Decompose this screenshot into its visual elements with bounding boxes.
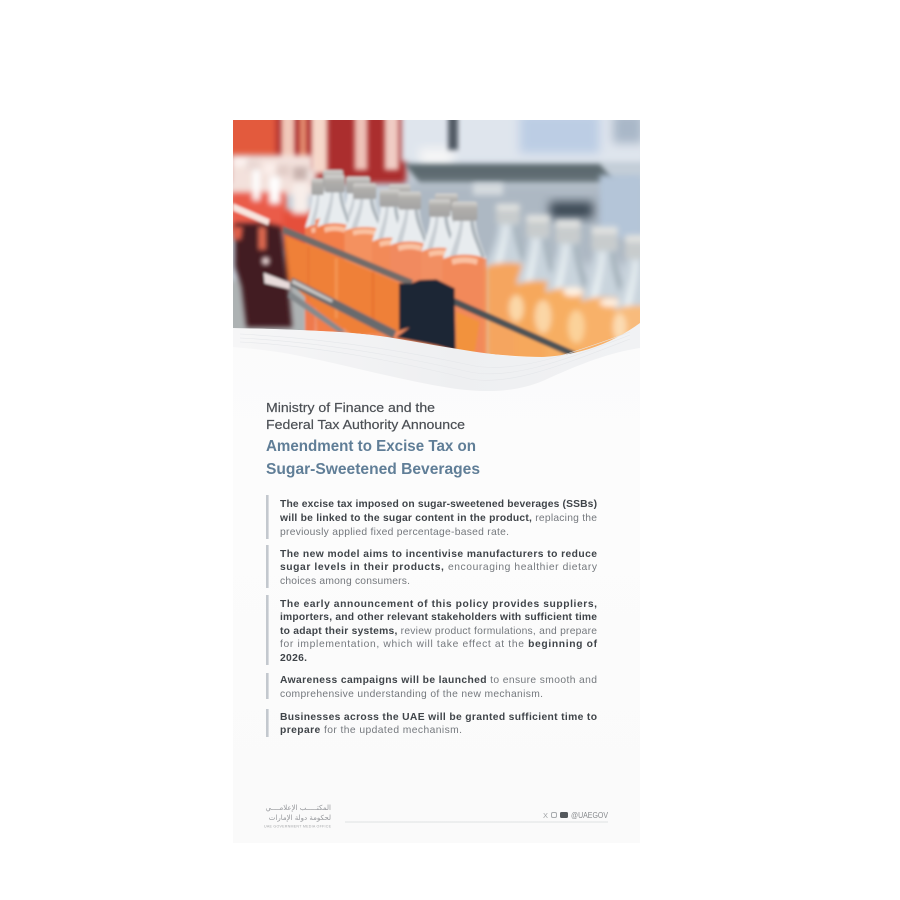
social handle: @UAEGOV [571,811,609,820]
bottles front row [316,174,488,354]
title: amendment to excise tax [266,438,480,478]
orange liquid below upper rail [285,235,480,353]
social icons [543,811,568,820]
text block: early announcement: importers, and other relevant stakeholders with sufficient time [280,612,597,623]
logo: UAE government media office: لحكومة دولة الإمارات [269,814,331,822]
text block: early announcement [266,595,598,665]
logo: UAE government media office [264,804,332,828]
text block: sugar content link: previously applied fixed percentage-based rate. [280,527,509,538]
icon: instagram [552,812,556,818]
text block: incentivise manufacturers: choices among consumers. [280,576,410,587]
text block: businesses preparation time: prepare for the updated mechanism. [280,725,462,736]
bottles out of focus right [483,201,640,357]
logo: UAE government media office: UAE GOVERNMENT MEDIA OFFICE [264,824,332,828]
rail bracket [396,279,456,351]
text block: businesses preparation time: Businesses across the UAE will be granted sufficient time to [280,712,597,723]
photo: orange drink bottles on conveyor [233,120,640,357]
text block: awareness campaigns: comprehensive understanding of the new mechanism. [280,689,543,700]
panel: infographic card [233,120,640,843]
wave: pale grey ribbon under photo [233,323,640,391]
text block: businesses preparation time [266,709,597,737]
text block: awareness campaigns [266,673,597,700]
dark conveyor frame left [233,223,292,327]
heading: ministry announcement [266,400,465,432]
text block: sugar content link: The excise tax imposed on sugar-sweetened beverages (SSBs) [280,499,597,510]
text block: incentivise manufacturers [266,545,598,588]
icon: X: X [543,811,548,820]
text block: incentivise manufacturers: The new model aims to incentivise manufacturers to reduce [280,549,597,560]
bottles back row [303,168,458,331]
text block: early announcement: for implementation, which will take effect at the beginning of [280,639,598,650]
text block: sugar content link [266,495,597,539]
photo background [233,120,640,354]
text block: early announcement: to adapt their systems, review product formulations, and prepare [280,626,597,637]
text block: early announcement: 2026. [280,653,307,664]
icon: youtube [560,812,568,818]
footer divider line [345,822,608,823]
lower conveyor rail [264,273,396,339]
text block: early announcement: The early announcement of this policy provides suppliers, [280,599,597,610]
text block: sugar content link: will be linked to the sugar content in the product, replacing the [279,513,597,524]
logo: UAE government media office: المكتـــــب الإعلامــــي [265,804,331,812]
text block: awareness campaigns: Awareness campaigns will be launched to ensure smooth and [280,675,597,686]
title: amendment to excise tax: Amendment to Excise Tax on [266,438,476,455]
text block: incentivise manufacturers: sugar levels in their products, encouraging healthier dietary [280,562,598,573]
heading: ministry announcement: Federal Tax Authority Announce [266,417,465,432]
upper conveyor rail [233,203,576,356]
distant blurred red bottles [230,155,316,250]
heading: ministry announcement: Ministry of Finance and the [266,400,435,415]
title: amendment to excise tax: Sugar-Sweetened Beverages [266,461,480,478]
